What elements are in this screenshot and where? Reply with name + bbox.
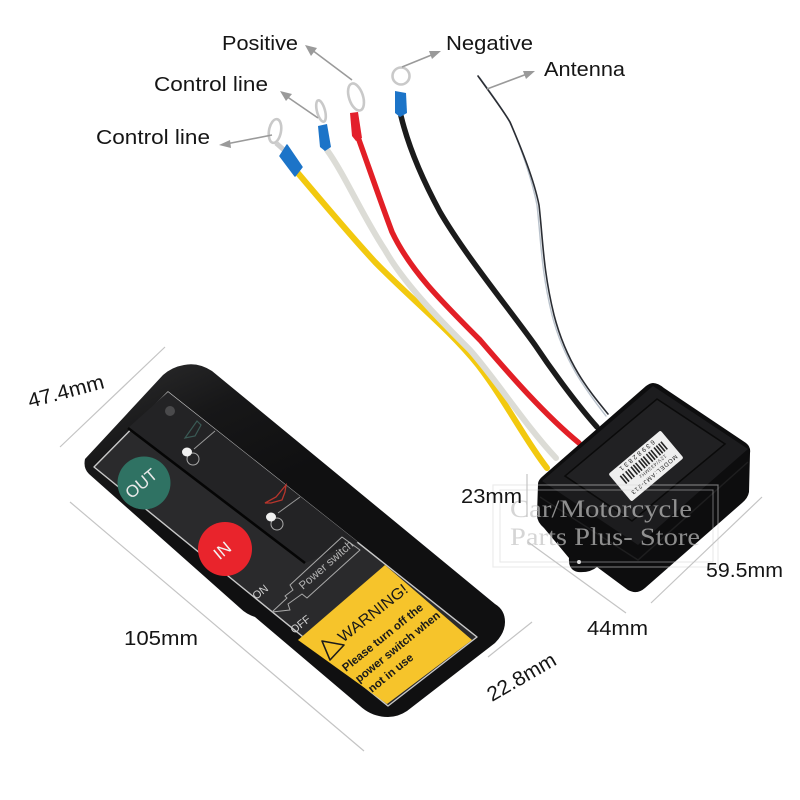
label: Control line lower: Control line	[96, 126, 210, 149]
dimension: 105mm	[70, 502, 364, 751]
LED dot	[165, 406, 175, 416]
antenna wire	[478, 76, 608, 416]
power switch marking: ON	[250, 583, 271, 602]
red positive wire with terminal	[345, 82, 579, 443]
watermark: Parts Plus- Store	[510, 524, 700, 551]
upper darker panel	[128, 392, 358, 563]
dimension: 44mm	[528, 542, 648, 640]
slider switch one	[182, 431, 215, 465]
dimension: 22.8mm: 22.8mm	[483, 648, 560, 706]
yellow control wire with terminal	[267, 118, 547, 468]
slider switch two	[266, 497, 300, 530]
label: Antenna	[487, 58, 626, 89]
yellow warning sticker: power switch when	[353, 610, 443, 685]
label: Control line upper: Control line	[154, 73, 268, 96]
IN button: IN	[210, 538, 235, 564]
remote control	[84, 364, 505, 717]
box label sticker: 12V/433MHz	[637, 453, 667, 479]
remote body	[84, 364, 505, 717]
black negative wire with terminal	[392, 68, 597, 427]
box label sticker	[608, 430, 684, 502]
yellow warning sticker: WARNING!	[335, 581, 412, 646]
dimension: 59.5mm: 59.5mm	[706, 559, 783, 582]
receiver box	[537, 383, 750, 592]
label: Positive: Positive	[222, 32, 298, 55]
recessed slit	[128, 428, 305, 563]
dimension: 105mm: 105mm	[124, 627, 198, 650]
box label sticker: MODEL:AMJ-213	[629, 453, 678, 495]
yellow warning sticker: Please turn off the	[340, 602, 426, 674]
down arrow icon	[265, 485, 286, 503]
label: Control line lower	[96, 126, 272, 149]
OUT button	[118, 456, 170, 510]
power switch marking	[250, 537, 360, 636]
dimension: 22.8mm	[483, 622, 560, 706]
watermark: Car/Motorcycle	[510, 496, 692, 523]
dimension: 23mm: 23mm	[461, 485, 522, 508]
up arrow icon	[185, 421, 201, 438]
label: Negative: Negative	[446, 32, 533, 55]
watermark	[493, 485, 718, 567]
dimension: 23mm	[461, 474, 527, 517]
white control wire with terminal	[314, 99, 556, 458]
IN button	[198, 522, 252, 576]
OUT button: OUT	[122, 465, 161, 503]
label: Control line upper	[154, 73, 318, 118]
box label sticker: 63982831	[617, 438, 656, 472]
label: Antenna: Antenna	[544, 58, 626, 81]
dimension: 44mm: 44mm	[587, 617, 648, 640]
yellow warning sticker: not in use	[366, 652, 416, 695]
power switch marking: Power switch	[297, 539, 356, 592]
label: Positive	[222, 32, 352, 80]
dimension: 47.4mm: 47.4mm	[25, 370, 107, 413]
label: Negative	[402, 32, 533, 67]
dimension: 47.4mm	[25, 347, 165, 447]
warning triangle icon	[322, 641, 344, 660]
dimension: 59.5mm	[651, 497, 783, 603]
yellow warning sticker	[298, 565, 472, 704]
power switch marking: OFF	[288, 613, 313, 636]
